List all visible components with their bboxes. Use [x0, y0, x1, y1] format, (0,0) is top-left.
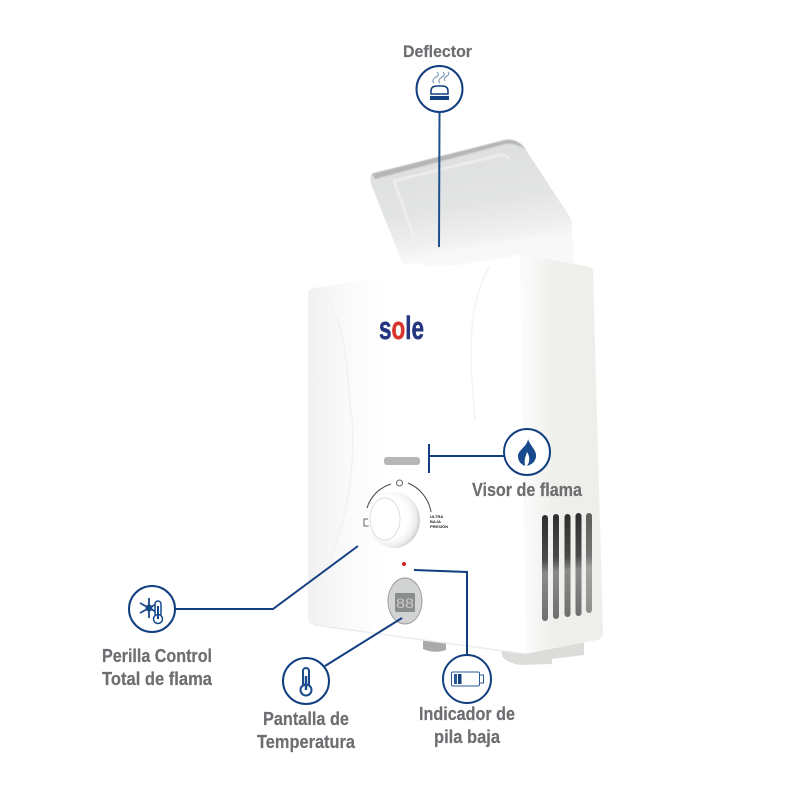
- label: Indicador de pila baja: [419, 704, 515, 747]
- leader line: LED: [414, 570, 467, 656]
- callout: Deflector: [403, 42, 472, 247]
- control knob: PRESIÓN: [430, 524, 448, 529]
- label: Deflector: Deflector: [403, 42, 472, 61]
- label: Perilla Control Total de flama: [102, 646, 213, 689]
- temperature display: 88: [396, 595, 414, 611]
- icon: deflector with heat: [430, 72, 449, 100]
- control knob: ULTRA: [430, 514, 443, 519]
- icon: flame: [518, 439, 536, 466]
- icon: thermometer: [300, 668, 312, 696]
- label: Indicador de pila baja: Indicador de: [419, 704, 515, 724]
- label: Perilla Control Total de flama: Perilla Control: [102, 646, 212, 666]
- red indicator LED: [402, 562, 406, 566]
- label: Pantalla de Temperatura: [257, 709, 356, 752]
- flame window: [384, 457, 420, 465]
- deflector hood: [370, 140, 574, 266]
- heater front panel: [308, 255, 526, 654]
- leader line: flame window: [429, 444, 505, 473]
- label: Pantalla de Temperatura: Pantalla de: [263, 709, 349, 729]
- label: Pantalla de Temperatura: Temperatura: [257, 732, 356, 752]
- temperature display: [388, 578, 422, 624]
- callout: Perilla Control: [102, 546, 358, 689]
- product: water heater: [308, 140, 603, 665]
- leader line: display: [325, 618, 402, 666]
- logo: sole: sole: [379, 310, 424, 346]
- leader line: knob: [175, 546, 358, 609]
- label: Indicador de pila baja: pila baja: [434, 727, 501, 747]
- side vents: [542, 513, 592, 621]
- control knob: BAJA: [430, 519, 441, 524]
- control knob: [364, 480, 448, 548]
- heater side panel: [512, 254, 603, 654]
- icon: battery: [452, 672, 484, 686]
- callout: Visor de flama: [429, 429, 583, 500]
- leader line: deflector: [438, 112, 440, 247]
- icon: snowflake and thermometer: [140, 598, 162, 624]
- feet: [423, 638, 584, 665]
- label: Visor de flama: Visor de flama: [472, 480, 583, 500]
- callout: Pantalla de Temperatura: [257, 618, 402, 752]
- label: Perilla Control Total de flama: Total de flama: [102, 669, 213, 689]
- callout: Indicador de pila baja: [414, 570, 515, 747]
